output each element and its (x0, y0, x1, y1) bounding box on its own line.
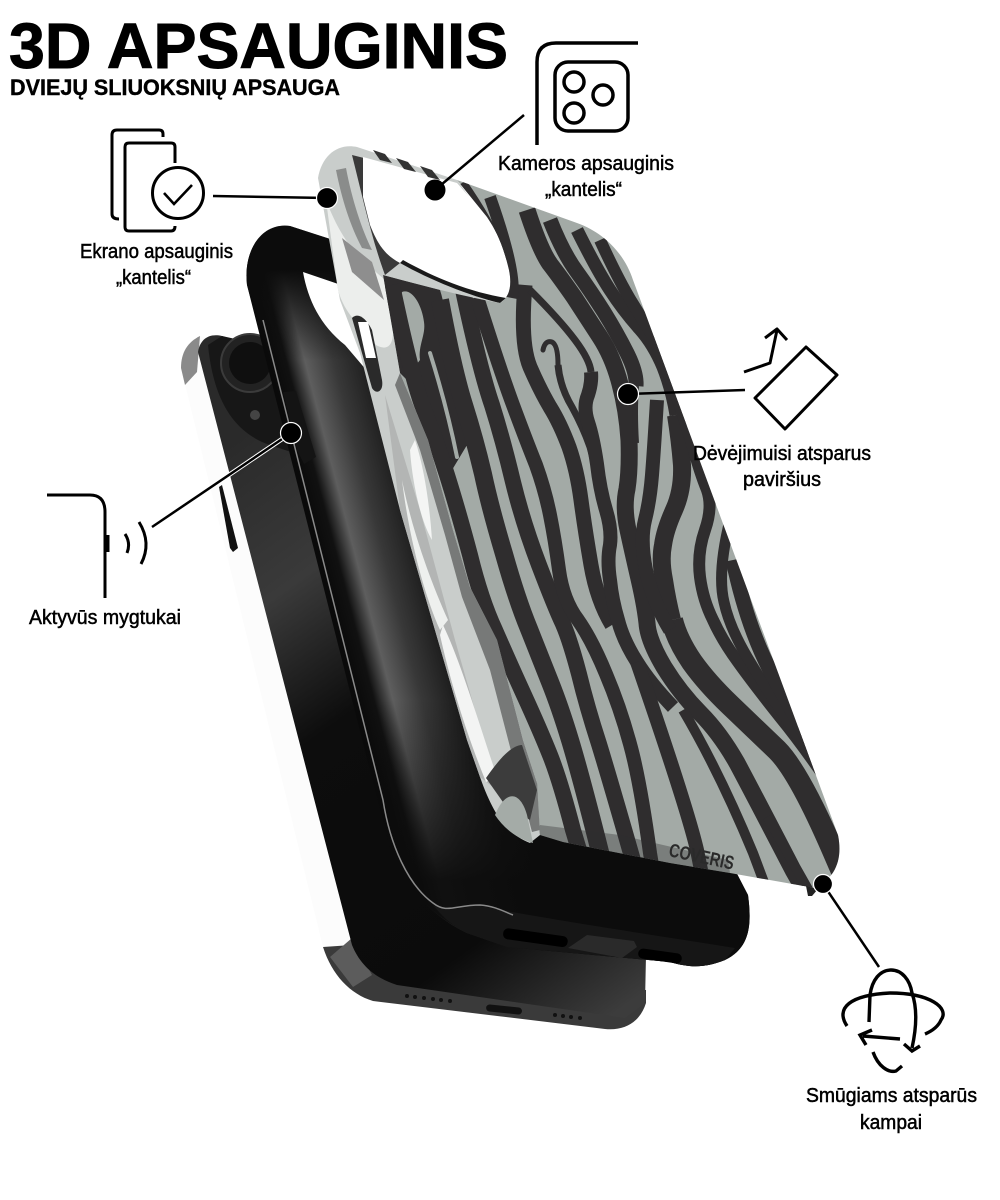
stripes (392, 183, 850, 900)
label: Dėvėjimuisi atsparus (693, 443, 871, 465)
zebra pattern (383, 180, 840, 888)
case side button (283, 391, 316, 464)
label: „kantelis“ (116, 267, 191, 289)
pointer (152, 422, 302, 527)
bottom case notch (806, 886, 818, 896)
icon: screen (112, 130, 204, 231)
callout: screen protection (80, 130, 338, 289)
brand mark: COVERIS (667, 840, 736, 875)
label: Kameros apsauginis (498, 153, 674, 175)
title: 3D APSAUGINIS (9, 10, 508, 82)
label (806, 1085, 977, 1134)
clear shell edge (318, 146, 540, 843)
striped top band (373, 150, 440, 180)
label: „kantelis“ (545, 179, 622, 201)
bottom edge shade (530, 825, 730, 873)
charging openings (502, 928, 682, 964)
phone side and frame (181, 336, 400, 1001)
label (693, 443, 871, 491)
label: Smūgiams atsparūs (806, 1085, 977, 1107)
pointer (618, 384, 745, 404)
phone (181, 334, 646, 1029)
middle black case (246, 226, 750, 966)
camera hole in shell (363, 157, 510, 303)
pointer (424, 115, 524, 200)
label (498, 153, 674, 201)
dark sliver under camera hole (400, 260, 506, 303)
phone back glass (198, 335, 646, 1018)
callout: active buttons (29, 422, 302, 629)
icon: rotation (843, 970, 943, 1071)
subtitle: DVIEJŲ SLIUOKSNIŲ APSAUGA (10, 75, 340, 100)
callout: camera protection (424, 43, 674, 201)
icon: side button (47, 495, 146, 598)
label: kampai (860, 1112, 922, 1134)
clear shell button slot (352, 316, 382, 392)
callout: wear resistant surface (618, 329, 871, 491)
grey tears (430, 353, 457, 457)
dark patch with grey blob (383, 275, 470, 470)
case lip highlight (263, 320, 513, 915)
label (80, 241, 233, 289)
label: Aktyvūs mygtukai (29, 607, 181, 629)
icon: camera (537, 43, 638, 145)
label: Ekrano apsauginis (80, 241, 233, 263)
pointer (213, 188, 338, 208)
label: paviršius (743, 469, 821, 491)
heading (9, 10, 508, 100)
camera lens (208, 334, 300, 455)
phone volume button (219, 485, 238, 552)
pointer (814, 874, 879, 967)
icon: card with arrow (744, 329, 837, 429)
camera opening (303, 272, 395, 392)
callout: impact resistant corners (806, 874, 977, 1134)
outer zebra shell (300, 130, 860, 900)
speaker and port (405, 994, 582, 1020)
